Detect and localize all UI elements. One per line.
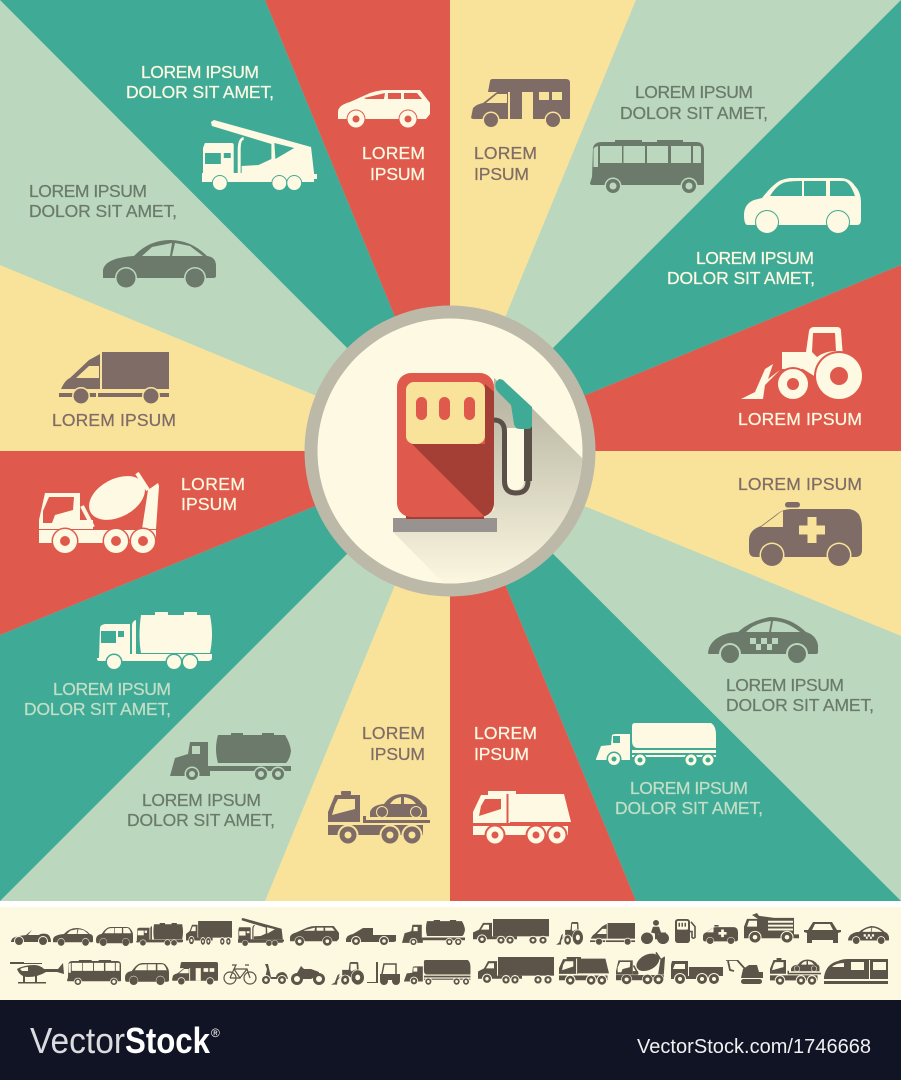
- long shadow: [393, 378, 582, 584]
- panel: dump truck on red wedge: [473, 723, 571, 846]
- panel: tanker truck on teal wedge: [596, 723, 763, 818]
- panel: tractor on red wedge: [738, 327, 864, 429]
- label: lorem ipsum: LOREM IPSUM: [738, 409, 862, 429]
- label: lorem ipsum: [474, 143, 537, 184]
- icon: station wagon: [338, 90, 430, 128]
- vehicle icon strip: [10, 913, 889, 986]
- label: dolor sit amet: LOREM IPSUM: [141, 62, 259, 82]
- label: dolor sit amet: [24, 679, 171, 719]
- footer logo: Stock: [125, 1020, 211, 1061]
- fuel pump icon: [393, 373, 532, 532]
- panel: wagon on red wedge: [338, 90, 430, 184]
- label: lorem ipsum: LOREM: [362, 723, 425, 743]
- label: lorem ipsum: LOREM: [474, 143, 537, 163]
- panel: delivery van on yellow wedge: [52, 352, 176, 430]
- label: lorem ipsum: LOREM IPSUM: [738, 474, 862, 494]
- label: lorem ipsum: LOREM: [362, 143, 425, 163]
- icon: delivery van: [59, 352, 169, 405]
- icon: ambulance: [749, 502, 862, 568]
- label: lorem ipsum: LOREM: [181, 474, 245, 494]
- label: dolor sit amet: DOLOR SIT AMET,: [667, 268, 815, 288]
- panel: ambulance on yellow wedge: [738, 474, 862, 568]
- icon: minivan: [744, 178, 861, 234]
- panel: tow truck on yellow wedge: [328, 723, 430, 846]
- panel: camper on yellow wedge: [471, 79, 570, 184]
- panel: minivan on teal wedge: [667, 178, 861, 288]
- label: lorem ipsum: [474, 723, 537, 764]
- label: dolor sit amet: [126, 62, 274, 102]
- label: dolor sit amet: DOLOR SIT AMET,: [620, 103, 768, 123]
- label: lorem ipsum: IPSUM: [474, 164, 529, 184]
- icon: sedan: [103, 240, 216, 289]
- central badge: fuel pump: [304, 306, 596, 596]
- label: lorem ipsum: [181, 474, 245, 514]
- label: dolor sit amet: LOREM IPSUM: [53, 679, 171, 699]
- label: lorem ipsum: IPSUM: [370, 164, 425, 184]
- label: dolor sit amet: DOLOR SIT AMET,: [24, 699, 171, 719]
- label: dolor sit amet: DOLOR SIT AMET,: [29, 201, 177, 221]
- white separator and cream strip: [0, 901, 901, 1000]
- icon: tanker truck: [170, 733, 291, 782]
- label: dolor sit amet: LOREM IPSUM: [696, 248, 814, 268]
- icon: tractor with bucket: [741, 327, 864, 401]
- label: dolor sit amet: [726, 675, 874, 715]
- panel: bus on light green wedge: [590, 82, 768, 194]
- panel: sedan on light green wedge: [29, 181, 216, 289]
- label: lorem ipsum: LOREM: [474, 723, 537, 743]
- label: dolor sit amet: LOREM IPSUM: [630, 778, 748, 798]
- icon: taxi: [708, 617, 818, 665]
- label: dolor sit amet: [667, 248, 815, 288]
- footer logo: ®: [211, 1026, 220, 1040]
- footer logo: [30, 1020, 220, 1061]
- label: dolor sit amet: [615, 778, 763, 818]
- icon: dump truck: [473, 791, 571, 846]
- label: dolor sit amet: DOLOR SIT AMET,: [726, 695, 874, 715]
- label: lorem ipsum: IPSUM: [474, 744, 529, 764]
- label: dolor sit amet: [620, 82, 768, 123]
- label: dolor sit amet: LOREM IPSUM: [142, 790, 261, 810]
- label: dolor sit amet: [127, 790, 275, 830]
- row one icons: [11, 913, 889, 946]
- label: lorem ipsum: [362, 143, 425, 184]
- panel: mixer on red wedge: [39, 467, 245, 554]
- footer bar: [0, 1000, 901, 1080]
- label: lorem ipsum: LOREM IPSUM: [52, 410, 176, 430]
- icon: bus: [590, 140, 704, 194]
- label: lorem ipsum: [362, 723, 425, 764]
- panel: tanker on teal wedge: [24, 612, 212, 719]
- panel: taxi on light green wedge: [708, 617, 874, 715]
- label: lorem ipsum: IPSUM: [181, 494, 237, 514]
- panel: tanker on light green wedge: [127, 733, 291, 830]
- label: dolor sit amet: [29, 181, 177, 221]
- icon: long tanker truck: [596, 723, 716, 767]
- label: dolor sit amet: LOREM IPSUM: [726, 675, 844, 695]
- icon: tow truck: [328, 791, 430, 846]
- row two icons: [10, 950, 888, 986]
- icon: concrete mixer: [39, 467, 159, 554]
- footer url: VectorStock.com/1746668: [637, 1036, 871, 1058]
- icon: crane truck: [202, 120, 317, 191]
- label: lorem ipsum: IPSUM: [370, 744, 425, 764]
- label: dolor sit amet: LOREM IPSUM: [29, 181, 147, 201]
- icon: tanker truck: [97, 612, 212, 670]
- label: dolor sit amet: DOLOR SIT AMET,: [126, 82, 274, 102]
- label: dolor sit amet: DOLOR SIT AMET,: [615, 798, 763, 818]
- icon: camper van: [471, 79, 570, 128]
- label: dolor sit amet: DOLOR SIT AMET,: [127, 810, 275, 830]
- panel: crane on teal wedge: [126, 62, 317, 191]
- label: dolor sit amet: LOREM IPSUM: [635, 82, 753, 102]
- footer logo: Vector: [30, 1020, 125, 1061]
